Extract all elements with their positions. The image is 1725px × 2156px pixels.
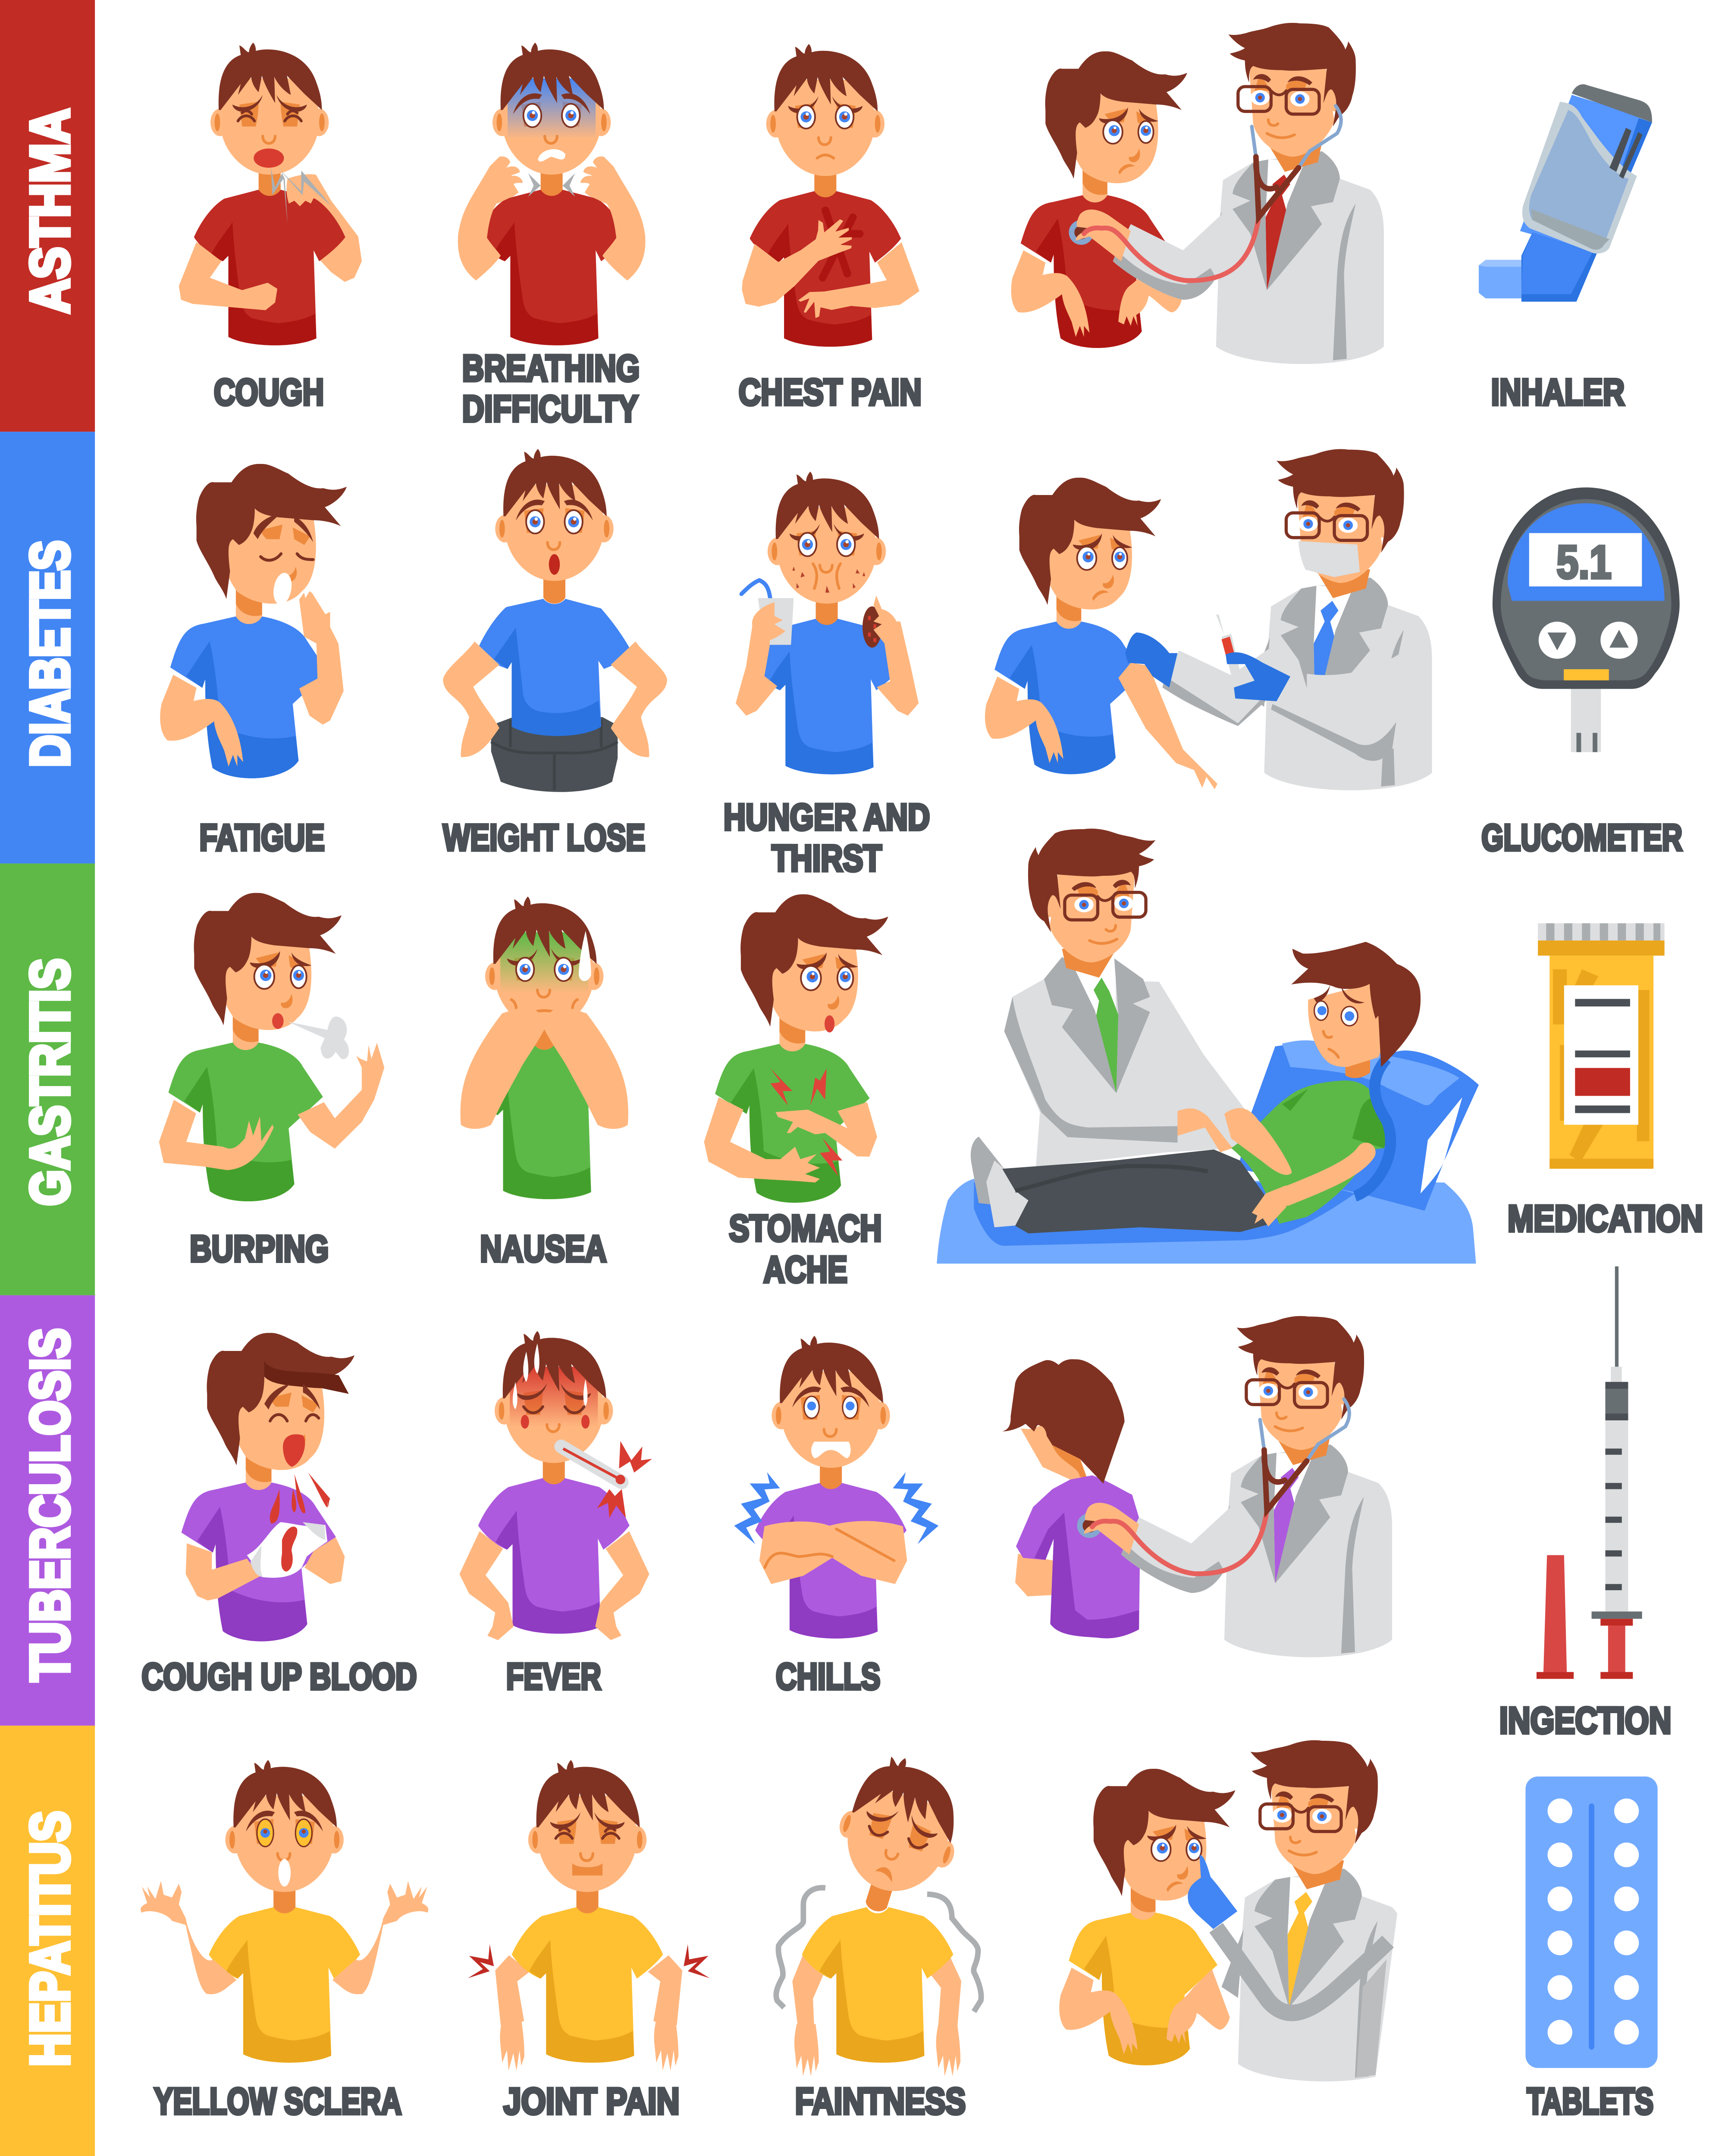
scene: doctor examining patient's eyes bbox=[1059, 1740, 1411, 2104]
doctor right arm and glove bbox=[1226, 630, 1430, 761]
figure: fatigue bbox=[160, 464, 347, 778]
label: chest pain: CHEST PAIN bbox=[739, 372, 922, 413]
doctor bbox=[1248, 449, 1432, 790]
panel: hepatitus row bbox=[0, 1726, 1658, 2156]
patient bbox=[985, 478, 1161, 774]
patient torso bbox=[1224, 1059, 1391, 1226]
label: fever: FEVER bbox=[506, 1656, 601, 1697]
doctor crossed arms bbox=[1216, 1928, 1388, 2013]
label: stomach ache bbox=[729, 1208, 882, 1291]
couch bbox=[937, 1178, 1476, 1263]
label: yellow sclera: YELLOW SCLERA bbox=[154, 2081, 401, 2122]
icon: glucometer bbox=[1493, 487, 1680, 752]
figure: faintness bbox=[776, 1745, 981, 2076]
sidebar heading: gastritis bbox=[0, 864, 95, 1295]
label: burping: BURPING bbox=[190, 1228, 329, 1270]
coat trim bbox=[1376, 1911, 1411, 2104]
patient bbox=[1011, 51, 1187, 348]
doctor left arm and glove bbox=[1125, 633, 1273, 726]
sidebar heading: tuberculosis: TUBERCULOSIS bbox=[19, 1328, 81, 1682]
patient bbox=[1059, 1769, 1235, 2065]
label: weight lose: WEIGHT LOSE bbox=[443, 817, 645, 859]
patient bare arm bbox=[1118, 663, 1217, 789]
syringe bbox=[1216, 614, 1245, 692]
blue glove bbox=[1188, 1855, 1237, 1929]
patient head bbox=[1291, 942, 1421, 1078]
figure: hunger and thirst bbox=[736, 472, 919, 774]
figure: joint pain bbox=[468, 1760, 710, 2071]
figure: nausea bbox=[461, 896, 628, 1199]
patient seen from behind bbox=[1002, 1359, 1140, 1638]
icon: tablets blister pack bbox=[1525, 1777, 1658, 2068]
scene: doctor examining asthma patient bbox=[1011, 23, 1384, 364]
label: hunger and thirst: THIRST bbox=[772, 838, 882, 879]
label: cough up blood: COUGH UP BLOOD bbox=[142, 1656, 417, 1697]
label: tablets: TABLETS bbox=[1527, 2081, 1653, 2122]
label: inhaler: INHALER bbox=[1491, 372, 1625, 413]
sidebar heading: gastritis: GASTRITIS bbox=[19, 959, 81, 1206]
pillow bbox=[1238, 1040, 1479, 1211]
icon: medication bottle bbox=[1538, 923, 1665, 1169]
figure: cough bbox=[179, 43, 362, 345]
doctor bbox=[1004, 829, 1251, 1167]
label: ingection: INGECTION bbox=[1499, 1700, 1672, 1741]
icon: inhaler bbox=[1479, 84, 1652, 302]
figure: cough up blood bbox=[182, 1333, 354, 1641]
jeans bbox=[491, 717, 618, 792]
sidebar heading: hepatitus: HEPATITUS bbox=[19, 1811, 81, 2067]
sidebar heading: hepatitus bbox=[0, 1726, 95, 2156]
label: breathing difficulty: DIFFICULTY bbox=[462, 388, 638, 429]
sidebar heading: asthma bbox=[0, 0, 95, 432]
figure: weight loss bbox=[443, 449, 667, 792]
panel: diabetes row bbox=[0, 432, 1682, 879]
label: breathing difficulty: BREATHING bbox=[462, 348, 640, 389]
figure: burping bbox=[159, 893, 384, 1201]
figure: yellow sclera bbox=[141, 1760, 428, 2063]
glucometer reading: 5.1 bbox=[1556, 536, 1612, 588]
panel: tuberculosis row bbox=[0, 1266, 1672, 1741]
icon: injection syringe bbox=[1537, 1266, 1642, 1679]
figure: chest pain bbox=[742, 44, 919, 347]
doctor bbox=[1208, 1316, 1392, 1657]
label: hunger and thirst bbox=[724, 796, 930, 879]
panel: gastritis row bbox=[0, 829, 1703, 1295]
patient legs bbox=[971, 1137, 1271, 1233]
stethoscope and arm bbox=[1072, 106, 1341, 300]
figure: breathing difficulty bbox=[458, 43, 645, 345]
stethoscope and arm bbox=[1080, 1399, 1349, 1593]
sidebar heading: tuberculosis bbox=[0, 1295, 95, 1726]
sidebar heading: asthma: ASTHMA bbox=[19, 109, 81, 313]
scene: doctor giving injection bbox=[985, 449, 1432, 790]
label: hunger and thirst: HUNGER AND bbox=[724, 796, 930, 838]
figure: fever bbox=[459, 1331, 652, 1640]
label: cough: COUGH bbox=[214, 372, 324, 413]
label: nausea: NAUSEA bbox=[480, 1228, 607, 1270]
label: faintness: FAINTNESS bbox=[795, 2081, 966, 2122]
couch pad bbox=[974, 1182, 1355, 1246]
label: joint pain: JOINT PAIN bbox=[503, 2081, 680, 2122]
figure: stomach ache bbox=[704, 894, 888, 1203]
scene: doctor examining patient on couch bbox=[937, 829, 1479, 1263]
coat shade bbox=[1356, 1959, 1386, 2078]
doctor bbox=[1199, 23, 1384, 364]
label: chills: CHILLS bbox=[776, 1656, 880, 1697]
face mask bbox=[1298, 541, 1360, 577]
label: stomach ache: STOMACH bbox=[729, 1208, 882, 1249]
sidebar heading: diabetes: DIABETES bbox=[19, 540, 81, 767]
figure: chills bbox=[734, 1336, 938, 1639]
label: breathing difficulty bbox=[462, 348, 640, 429]
label: fatigue: FATIGUE bbox=[200, 817, 325, 859]
scene: doctor listening to patient's back bbox=[1002, 1316, 1392, 1657]
panel: asthma row bbox=[0, 0, 1652, 432]
doctor bbox=[1222, 1740, 1406, 2081]
sidebar heading: diabetes bbox=[0, 432, 95, 864]
label: stomach ache: ACHE bbox=[763, 1249, 847, 1291]
